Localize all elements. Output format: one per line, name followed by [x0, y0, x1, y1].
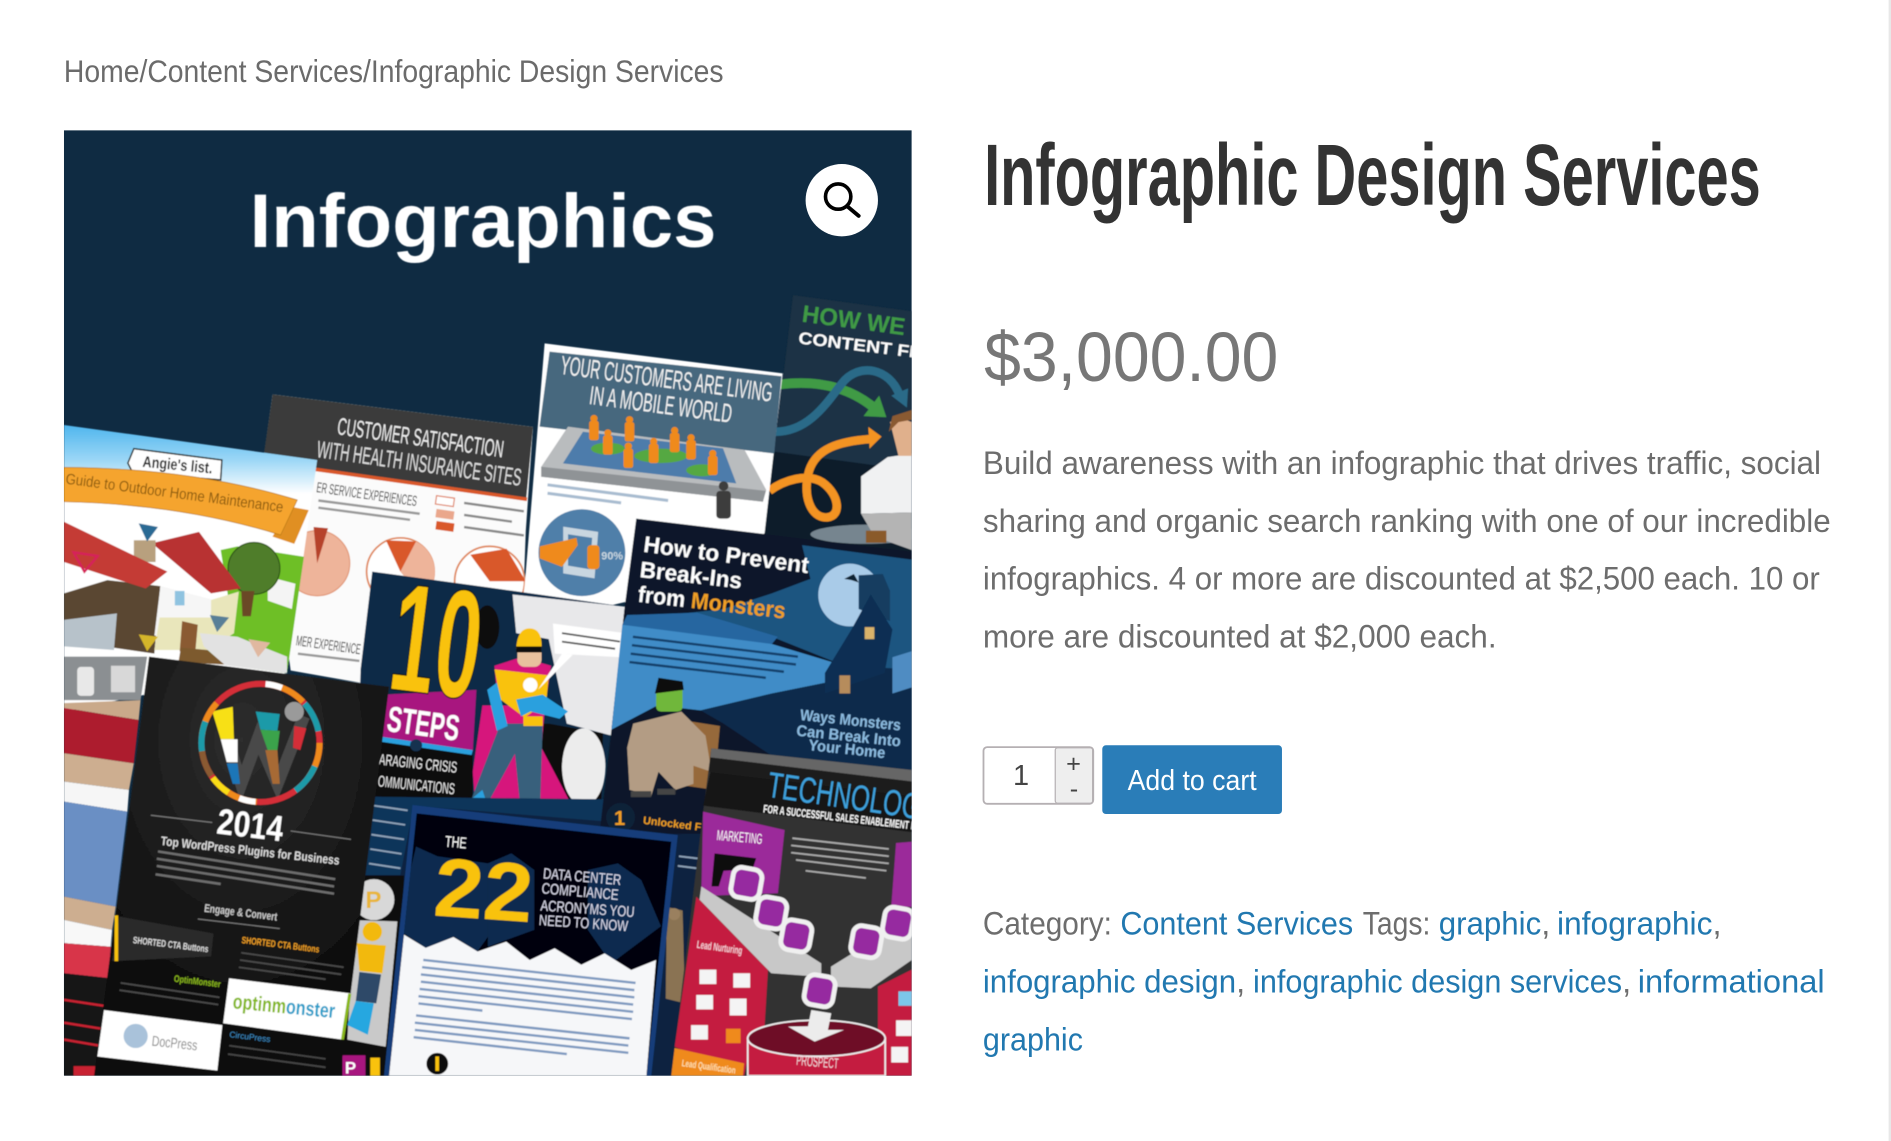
panel: mobile world: YOUR CUSTOMERS ARE LIVING — [559, 350, 774, 408]
panel: 22 acronyms: THE — [444, 834, 467, 852]
product image: infographics collage — [64, 130, 924, 1077]
panel: how we content: HOW WE — [800, 301, 907, 341]
add to cart button — [1102, 745, 1282, 814]
panel: angie's list lower strips — [64, 708, 139, 1076]
wordpress plugin cells: DocPress — [151, 1034, 198, 1054]
smoke background — [513, 595, 625, 736]
category and tags: Content Services — [1120, 906, 1353, 942]
panel: 10 steps: STEPS — [385, 698, 462, 749]
panel: technology: TECHNOLOG — [765, 764, 924, 827]
wordpress plugin cells: OptinMonster — [173, 974, 222, 990]
wordpress logo — [201, 684, 320, 802]
panel: technology: FOR A SUCCESSFUL SALES ENABLEMENT M — [763, 804, 917, 833]
panel: 22 acronyms: ACRONYMS YOU — [540, 898, 635, 921]
angie's list label: Angie's list. — [142, 454, 213, 477]
wordpress plugin cells: optinmonster — [232, 990, 336, 1023]
category and tags: graphic — [1439, 906, 1541, 942]
panel: 22 acronyms: 22 — [431, 841, 536, 940]
superhero — [468, 628, 571, 804]
speech bubble — [538, 624, 625, 690]
prospect cylinder — [748, 1010, 885, 1076]
panel: hero strip behind — [340, 796, 700, 1076]
panel: customer satisfaction: ER SERVICE EXPERIENCES — [315, 480, 418, 510]
panel: angie's list guide: Guide to Outdoor Home Maintenance — [65, 471, 284, 516]
collage of tilted infographic thumbnails — [64, 295, 924, 1077]
panel: customer satisfaction — [263, 394, 533, 724]
panel: 10 steps: 10 — [382, 550, 492, 732]
description text block: infographics. 4 or more are discounted at $2,500 each. 10 or — [983, 561, 1820, 597]
panel: wordpress plugins: 2014 — [215, 801, 286, 849]
panel: wordpress plugins: Top WordPress Plugins for Business — [160, 834, 340, 868]
description text block: Build awareness with an infographic that drives traffic, social — [983, 445, 1821, 481]
category and tags: infographic design services — [1253, 964, 1622, 1000]
image heading: Infographics — [250, 179, 716, 264]
prospect cylinder: PROSPECT — [796, 1053, 839, 1073]
add to cart button: Add to cart — [1128, 765, 1257, 797]
quantity input: + — [1066, 750, 1081, 778]
category and tags: infographic — [1557, 906, 1713, 942]
panel: monsters — [599, 519, 912, 836]
panel: 22 acronyms: NEED TO KNOW — [538, 912, 629, 935]
category and tags: graphic — [983, 1021, 1083, 1057]
category and tags: , — [1713, 906, 1722, 942]
wordpress plugin cells: CircuPress — [229, 1029, 271, 1044]
category and tags: , — [1541, 906, 1550, 942]
panel: customer satisfaction: MER EXPERIENCE — [295, 633, 362, 658]
monster at door — [627, 678, 720, 797]
quantity input: - — [1070, 775, 1078, 803]
panel: monsters: Break-Ins — [639, 556, 743, 594]
image background — [64, 130, 912, 1076]
panel: wordpress plugins — [94, 657, 389, 1076]
category and tags: , — [1622, 964, 1631, 1000]
panel: technology: Lead Nurturing — [696, 939, 743, 957]
category and tags: , — [1236, 964, 1245, 1000]
panel: 22 acronyms — [384, 805, 678, 1076]
wordpress plugin cells — [97, 915, 351, 1071]
panel: monsters: Your Home — [808, 737, 886, 762]
panel: 10 steps — [357, 550, 625, 806]
panel: mobile world: IN A MOBILE WORLD — [588, 380, 734, 429]
category and tags: Category: — [983, 906, 1112, 942]
breadcrumb: Home/Content Services/Infographic Design Services — [64, 54, 724, 89]
panel: hero strip behind: P — [345, 1058, 356, 1077]
panel: monsters: 1 — [614, 807, 625, 830]
category and tags: Tags: — [1363, 906, 1430, 942]
description text block — [983, 445, 1831, 655]
panel: monsters: How to Prevent — [642, 531, 811, 578]
panel: angie's list guide — [64, 425, 317, 720]
category and tags: informational — [1638, 964, 1825, 1000]
icon: zoom magnifier button — [806, 164, 878, 236]
panel: technology: Lead Qualification — [681, 1058, 736, 1077]
category and tags: infographic design — [983, 964, 1236, 1000]
panel: how we content — [757, 295, 924, 579]
price: $3,000.00 — [984, 318, 1278, 396]
panel: monsters: Unlocked Front — [642, 815, 723, 836]
panel: customer satisfaction: CUSTOMER SATISFACTION — [336, 413, 505, 463]
panel: mobile world: 90% — [601, 551, 623, 563]
quantity input — [983, 747, 1093, 804]
category and tags — [983, 906, 1825, 1057]
description text block: more are discounted at $2,000 each. — [983, 619, 1497, 655]
panel: monsters: Ways Monsters — [799, 707, 902, 735]
angie's list label — [128, 449, 222, 480]
wordpress plugin cells: SHORTED CTA Buttons — [241, 935, 320, 956]
panel: technology — [671, 748, 924, 1077]
panel: how we content: CONTENT FR — [797, 328, 924, 363]
panel: monsters: Can Break Into — [796, 723, 902, 751]
panel: 22 acronyms: COMPLIANCE — [541, 880, 619, 904]
quantity input: 1 — [1013, 760, 1029, 792]
scrollbar edge — [1889, 0, 1891, 1141]
wordpress plugin cells: SHORTED CTA Buttons — [132, 935, 209, 955]
panel: 10 steps: OMMUNICATIONS — [377, 773, 456, 798]
panel: 22 acronyms: DATA CENTER — [542, 865, 622, 889]
panel: hero strip behind: P — [365, 887, 382, 914]
panel: 10 steps: ARAGING CRISIS — [378, 752, 458, 777]
panel: monsters: from Monsters — [637, 581, 787, 624]
panel: wordpress plugins: Engage & Convert — [203, 903, 278, 924]
description text block: sharing and organic search ranking with one of our incredible — [983, 503, 1831, 539]
panel: mobile world — [519, 343, 783, 627]
panel: technology: MARKETING — [716, 828, 763, 848]
panel: customer satisfaction: WITH HEALTH INSURANCE SITES — [315, 436, 523, 492]
